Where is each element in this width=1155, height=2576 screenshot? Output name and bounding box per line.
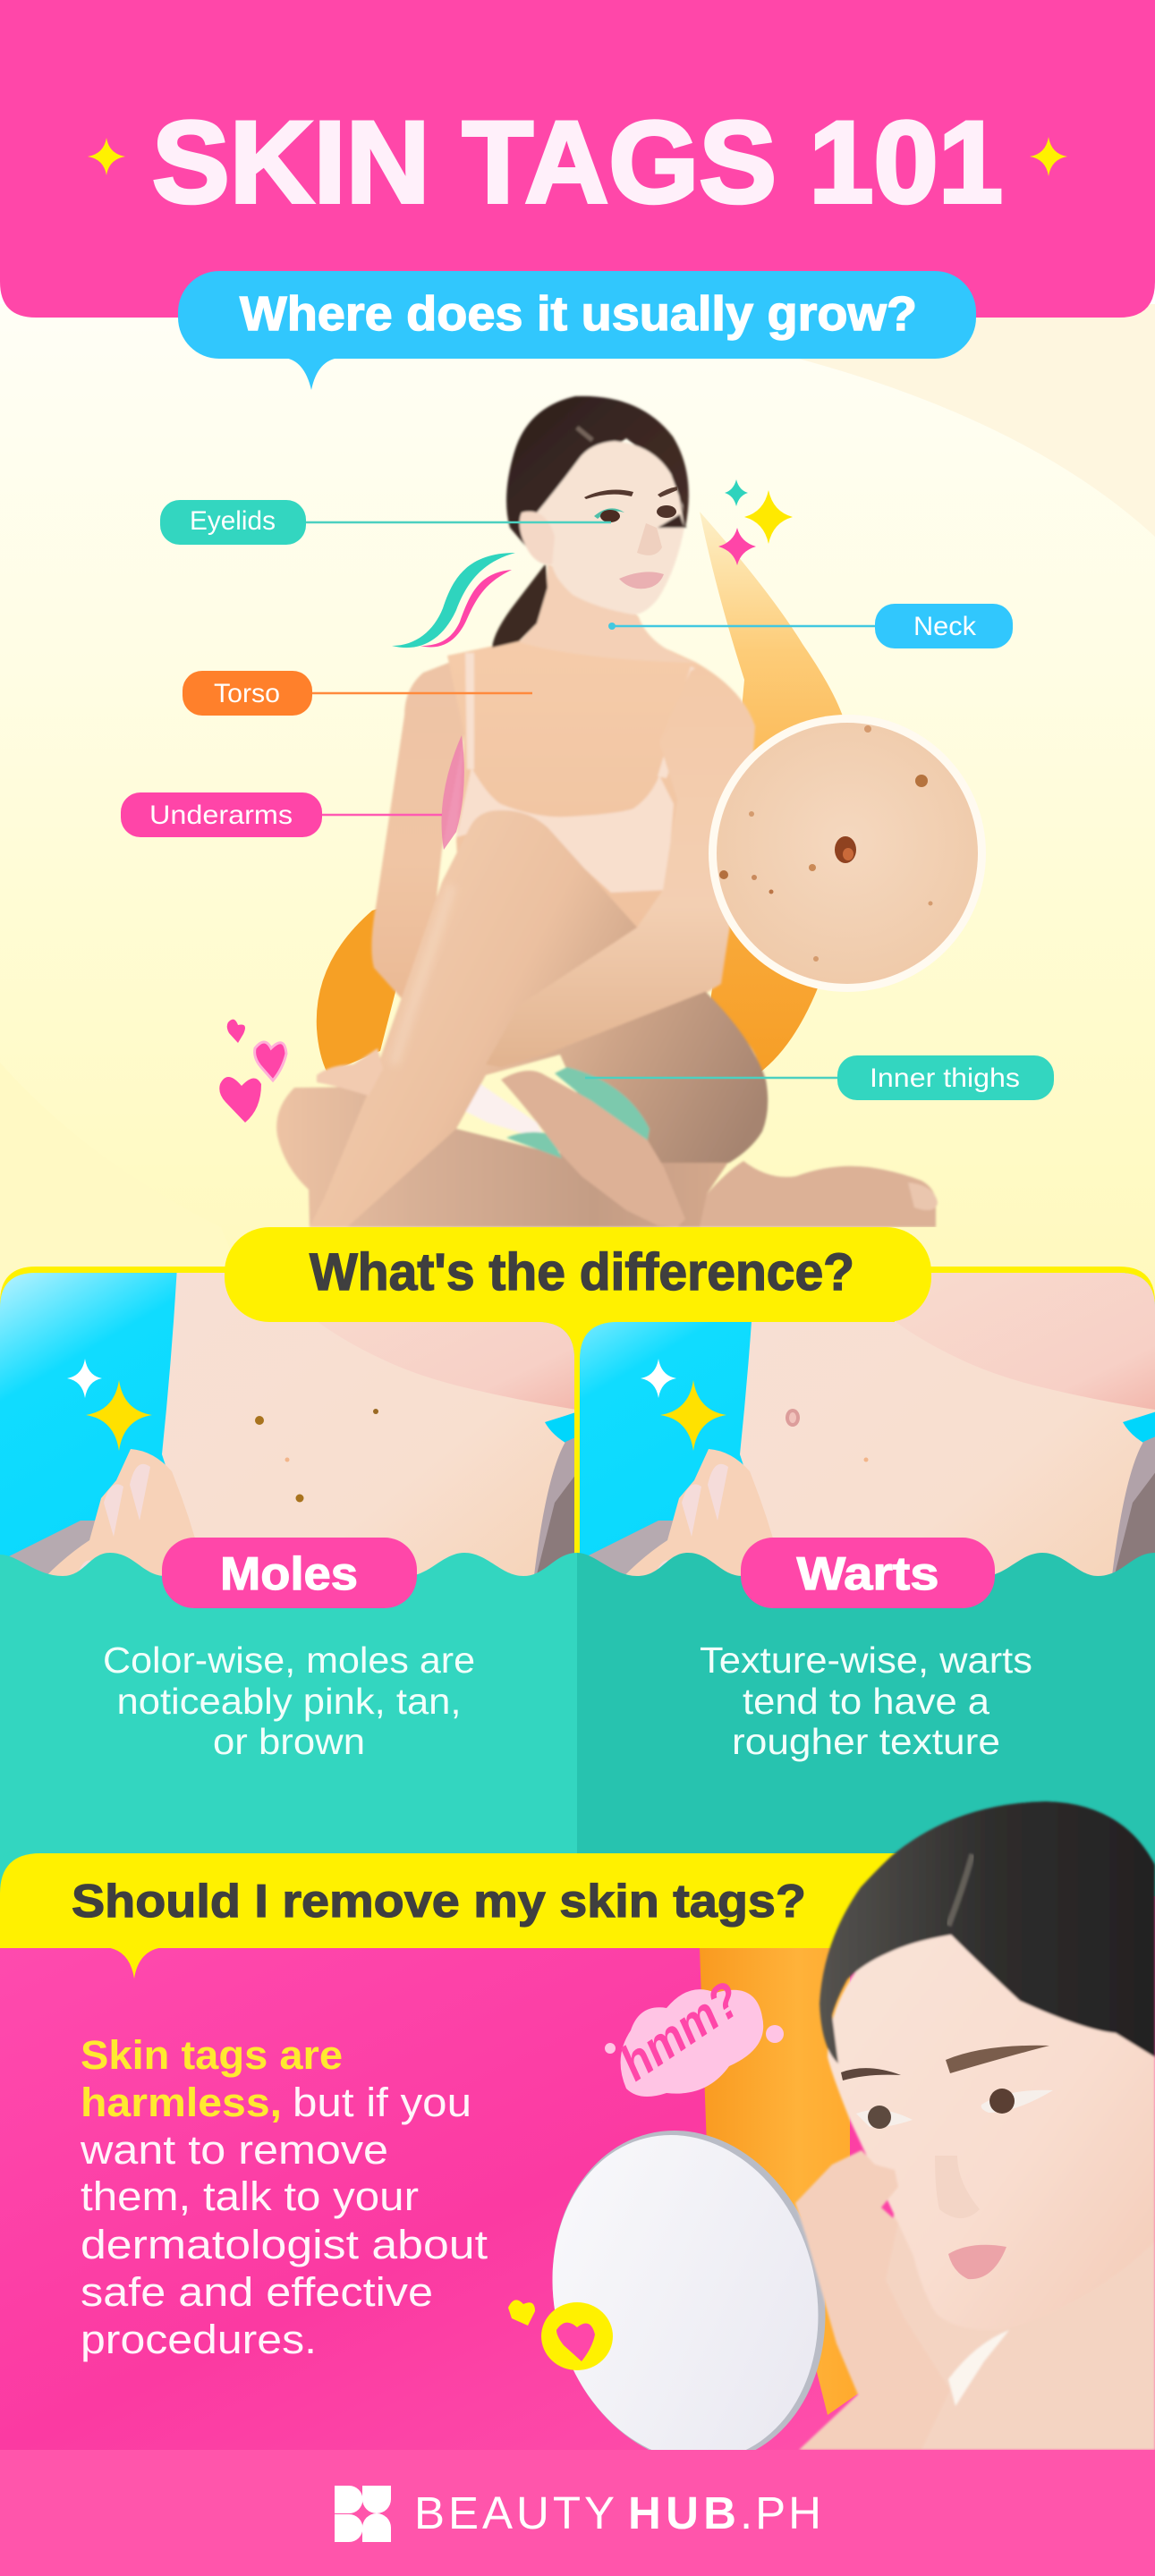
heading bubble: difference: [225, 1227, 931, 1322]
text block: moles description: or brown: [213, 1721, 365, 1762]
icon: decorative swirl: [392, 553, 515, 648]
label: Neck: Neck: [913, 612, 977, 641]
panel photo: moles: [0, 1273, 574, 1576]
title: SKIN TAGS 101: [152, 97, 1003, 227]
label: Torso: Torso: [214, 679, 280, 708]
icon: sparkles moles panel: [67, 1359, 152, 1451]
text block: advice: procedures.: [81, 2317, 317, 2362]
second woman photo: [795, 1801, 1155, 2450]
label: Moles: Moles: [220, 1548, 358, 1600]
ear: [520, 512, 555, 565]
heading bubble: difference: What's the difference?: [310, 1243, 854, 1301]
header banner: [0, 0, 1155, 318]
orange crescent behind woman: [317, 512, 852, 1073]
footer bar: [0, 2450, 1155, 2576]
text block: advice: want to remove: [80, 2127, 388, 2173]
text block: advice: dermatologist about: [81, 2222, 488, 2267]
heading bar: should I remove: [0, 1853, 904, 1979]
text block: warts description: [700, 1640, 1032, 1762]
icon: yellow hearts: [508, 2300, 613, 2370]
text block: advice: them, talk to your: [81, 2174, 419, 2219]
footer brand text: BEAUTY: [414, 2487, 615, 2538]
label: Inner thighs: [837, 1055, 1054, 1100]
icon: sparkles warts panel: [641, 1359, 726, 1451]
footer brand text: HUB: [628, 2487, 736, 2538]
panel: pink advice background: [0, 1896, 1155, 2451]
callout line: inner thighs: [585, 1077, 837, 1079]
label: Torso: [183, 671, 312, 716]
hair parting: [948, 1854, 972, 1926]
callout line: underarms: [322, 814, 442, 816]
label: Eyelids: Eyelids: [190, 506, 276, 536]
icon: pink hearts: [219, 1020, 286, 1123]
mirror: [553, 2131, 825, 2450]
callout line: neck: [608, 623, 875, 630]
page background: [0, 304, 1155, 1342]
callout line: torso: [312, 692, 532, 694]
heading bubble: where does it grow: [178, 271, 976, 390]
icon: title sparkle right: [1030, 137, 1067, 176]
label: Moles: [162, 1538, 417, 1608]
text block: advice: [80, 2032, 488, 2362]
label: Neck: [875, 604, 1013, 648]
footer brand text: .PH: [740, 2487, 821, 2538]
text block: warts description: Texture-wise, warts: [700, 1640, 1032, 1681]
facial features: [584, 487, 677, 589]
skin closeup circle: [709, 715, 986, 992]
label: Inner thighs: Inner thighs: [870, 1063, 1020, 1093]
panel photo: warts: [580, 1273, 1155, 1576]
face features: [841, 2046, 1053, 2279]
text block: advice: safe and effective: [81, 2269, 433, 2315]
text block: advice: but if you: [293, 2080, 471, 2125]
icon: BeautyHub logo: [335, 2486, 391, 2542]
icon: sparkles near head: [718, 479, 793, 565]
label: Eyelids: [160, 500, 306, 545]
footer brand text: [414, 2487, 821, 2538]
hair back: [506, 396, 689, 559]
pink underarm highlight: [442, 735, 464, 850]
icon: title sparkle left: [88, 138, 125, 175]
text block: advice: harmless,: [81, 2080, 282, 2125]
heading bubble: where does it grow: Where does it usually grow?: [240, 287, 917, 341]
text block: warts description: tend to have a: [743, 1681, 989, 1722]
orange shape behind second woman: [700, 1948, 863, 2415]
text block: warts description: rougher texture: [732, 1721, 1000, 1762]
text block: moles description: noticeably pink, tan,: [116, 1681, 462, 1722]
label: Warts: Warts: [796, 1548, 939, 1600]
callout line: eyelids: [306, 521, 611, 523]
callout: hmm bubble: hmm?: [609, 1970, 751, 2091]
text block: moles description: Color-wise, moles are: [103, 1640, 475, 1681]
heading bar: should I remove: Should I remove my skin tags?: [72, 1876, 806, 1928]
woman seated illustration: [276, 396, 938, 1227]
text block: moles description: [103, 1640, 475, 1762]
text block: advice: Skin tags are: [81, 2032, 343, 2078]
face: [537, 441, 684, 614]
shin highlight: [394, 886, 452, 1064]
label: Underarms: [121, 792, 322, 837]
panel: warts text area: [577, 1553, 1155, 1901]
panel: moles text area: [0, 1553, 577, 1901]
label: Underarms: Underarms: [149, 801, 293, 830]
label: Warts: [741, 1538, 995, 1608]
section background yellow frame: [0, 1267, 1155, 1610]
